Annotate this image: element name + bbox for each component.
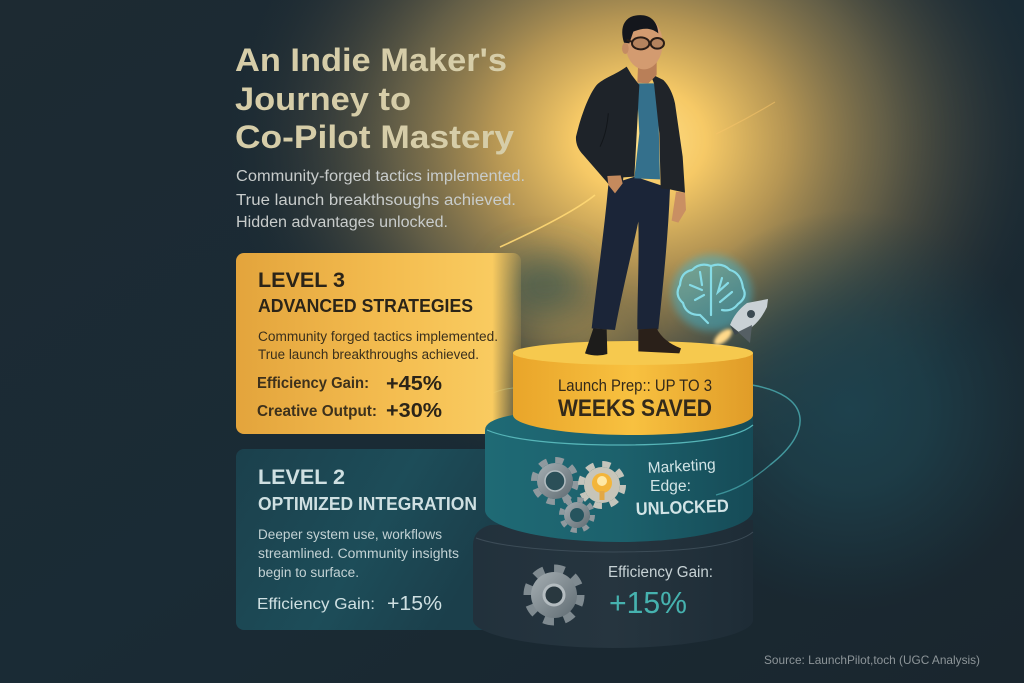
tier 1 label: Efficiency Gain: (608, 564, 713, 581)
level 2 metric: Efficiency Gain: (257, 596, 375, 613)
level 2 description: begin to surface. (258, 565, 359, 580)
level 2 description: Deeper system use, workflows (258, 527, 442, 542)
intro text: True launch breakthsoughs achieved. (236, 192, 516, 209)
intro text (236, 168, 525, 231)
level 3 description: Community forged tactics implemented. (258, 329, 498, 344)
level 3 heading (258, 269, 473, 316)
pedestal tier 2: teal (485, 415, 770, 542)
icon: rocket (711, 299, 768, 348)
panel: level 3 (236, 253, 521, 434)
level 2 metric (257, 593, 442, 615)
pedestal tier 3: gold (513, 341, 753, 435)
title (235, 42, 514, 155)
icon: gears with lightbulb (534, 460, 623, 530)
tier 1 label (608, 564, 713, 620)
tier 2 label: Edge: (650, 478, 691, 495)
icon: single gear (528, 569, 580, 621)
level 2 description (258, 527, 459, 580)
pedestal tier 1: dark (473, 520, 753, 648)
level 3 heading: ADVANCED STRATEGIES (258, 296, 473, 316)
level 2 metric: +15% (387, 593, 442, 615)
tier 3 label: WEEKS SAVED (558, 395, 712, 422)
intro text: Hidden advantages unlocked. (236, 214, 448, 231)
tier 1 label: +15% (609, 585, 687, 620)
title: Journey to (235, 81, 411, 117)
level 3 metrics: Efficiency Gain: (257, 375, 369, 392)
tier 3 label (558, 377, 712, 422)
level 3 metrics: +30% (386, 400, 442, 422)
intro text: Community-forged tactics implemented. (236, 168, 525, 185)
level 3 metrics: Creative Output: (257, 403, 377, 420)
title: Co-Pilot Mastery (235, 119, 514, 155)
tier 2 label: UNLOCKED (635, 496, 729, 519)
tier 2 label (635, 456, 729, 519)
icon: neon brain (672, 255, 752, 331)
glasses (627, 37, 664, 49)
level 2 heading: OPTIMIZED INTEGRATION (258, 494, 477, 514)
level 2 description: streamlined. Community insights (258, 546, 459, 561)
level 2 heading: LEVEL 2 (258, 466, 345, 489)
panel: level 2 (236, 449, 501, 630)
level 3 metrics (257, 373, 442, 422)
level 3 description (258, 329, 498, 362)
tier 2 label: Marketing (647, 456, 716, 477)
level 2 heading (258, 466, 477, 514)
level 3 heading: LEVEL 3 (258, 269, 345, 292)
level 3 description: True launch breakthroughs achieved. (258, 347, 479, 362)
source note: Source: LaunchPilot,toch (UGC Analysis) (764, 653, 980, 667)
title: An Indie Maker's (235, 42, 507, 78)
figure: indie maker (576, 15, 686, 356)
tier 3 label: Launch Prep:: UP TO 3 (558, 377, 712, 395)
level 3 metrics: +45% (386, 373, 442, 395)
